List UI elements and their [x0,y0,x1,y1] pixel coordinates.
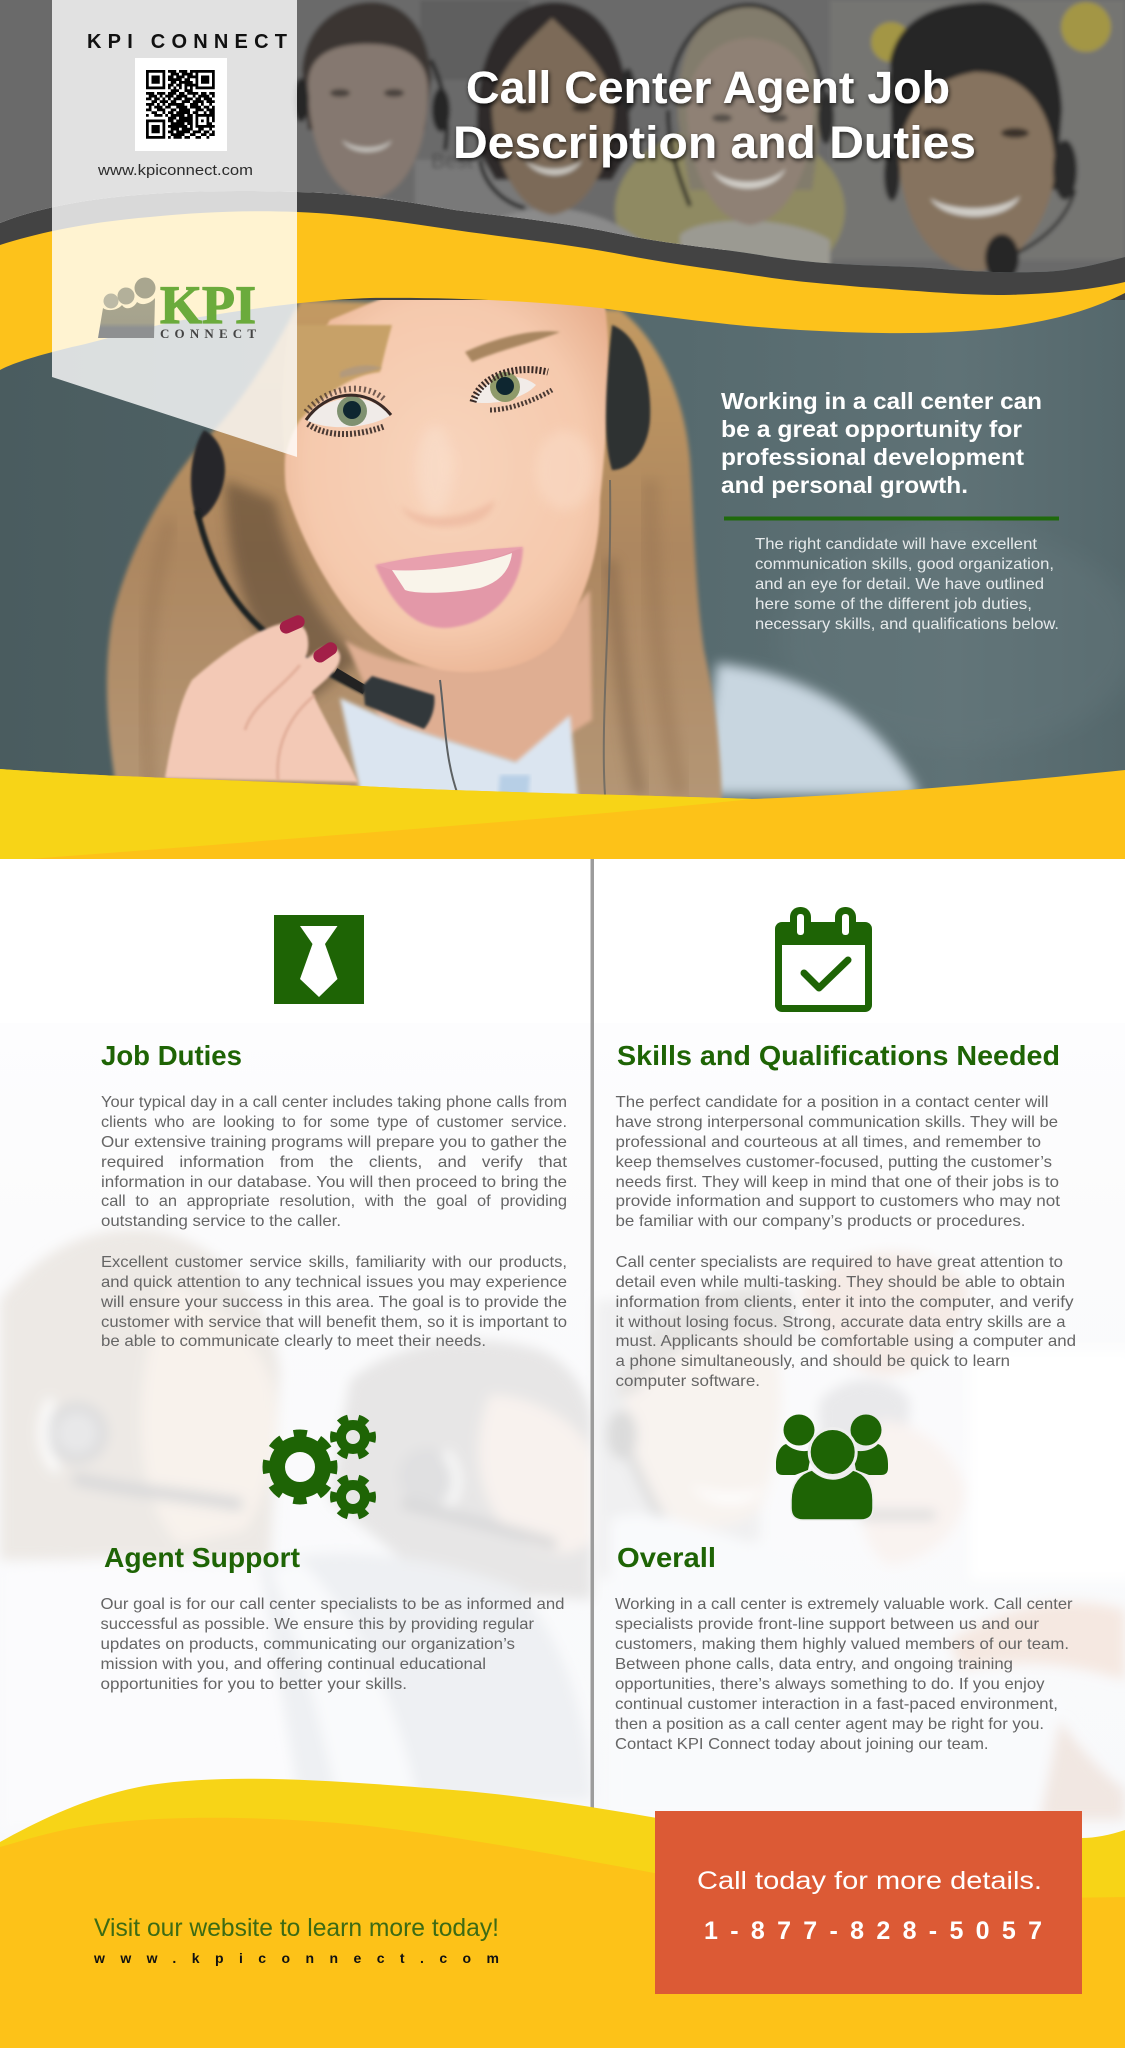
bottom wave: light yellow [0,1779,1125,2048]
brand name: KPI CONNECT [87,31,287,53]
overall text: customers, making them highly valued members of our team. [615,1636,1069,1653]
skills and qualifications text: Call center specialists are required to have great attention to [616,1254,1063,1271]
agent 4 [884,2,1077,282]
skills and qualifications text [616,1094,1076,1390]
skills and qualifications text: be familiar with our company’s products or procedures. [616,1213,1026,1230]
far right agents and hand [800,1252,1125,1820]
intro headline [721,388,1042,498]
bottom yellow band of hero [0,769,1125,859]
icon: group of people [776,1414,888,1520]
intro body text: The right candidate will have excellent [755,536,1038,553]
callout: phone number box: 1-877-828-5057 [704,1917,1042,1945]
faded background photo of call center agents [0,1226,1125,1827]
skills and qualifications text: a phone simultaneously, and should be quick to learn [616,1353,1010,1370]
agent support text: opportunities for you to better your skills. [100,1676,407,1693]
intro headline: be a great opportunity for [721,416,1022,442]
heading: job duties: Job Duties [101,1040,242,1071]
job duties text: will ensure your success in this area. The goal is to provide the [100,1294,567,1311]
intro headline: professional development [721,444,1024,470]
overall text: Between phone calls, data entry, and ongoing training [615,1656,1013,1673]
website call to action: www.kpiconnect.com [93,1950,499,1966]
left agent [0,1227,282,1562]
icon: calendar with check mark [775,907,872,1012]
skills and qualifications text: professional and courteous at all times, and remember to [616,1134,1041,1151]
left eye [306,389,391,434]
website url: www.kpiconnect.com [97,162,253,179]
intro headline: and personal growth. [721,472,968,498]
bottom wave: deep yellow [0,1818,1125,2048]
overall text: then a position as a call center agent may be right for you. [615,1716,1044,1733]
job duties text: required information from the clients, and verify that [101,1154,568,1171]
heading: skills and qualifications: Skills and Qualifications Needed [617,1040,1060,1071]
KPI Connect logo: KPI [160,275,256,335]
KPI Connect logo: CONNECT [160,326,256,341]
heading: agent support: Agent Support [104,1542,300,1573]
right eye [472,370,552,410]
icon: necktie [274,915,364,1004]
agent 2 [475,0,640,238]
skills and qualifications text: provide information and support to customers who may not [616,1193,1061,1210]
skills and qualifications text: needs first. They will keep in mind that one of their jobs is to [616,1174,1059,1191]
headset earpieces and boom [191,325,650,795]
overall text: continual customer interaction in a fast-paced environment, [615,1696,1058,1713]
website call to action [93,1914,499,1966]
microphone capsule [335,672,435,729]
website call to action: Visit our website to learn more today! [94,1914,499,1942]
overall text [615,1596,1073,1753]
job duties text: call to an appropriate resolution, with the goal of providing [101,1193,567,1210]
top photo: row of four smiling agents under dark overlay [0,0,1125,295]
intro body text: here some of the different job duties, [755,596,1032,613]
job duties text: information in our database. You will then proceed to bring the [101,1174,567,1191]
agent support text [100,1596,564,1693]
agent 3 [668,5,834,290]
intro body text: necessary skills, and qualifications below. [755,616,1059,633]
centre agent [260,1340,592,1810]
skills and qualifications text: computer software. [616,1373,760,1390]
skills and qualifications text: it without losing focus. Strong, accurate data entry skills are a [616,1314,1066,1331]
overall text: Contact KPI Connect today about joining our team. [615,1736,988,1753]
top photo: row of four smiling agents under dark overlay: Best [431,150,473,173]
agent support text: updates on products, communicating our organization’s [100,1636,515,1653]
overall text: Working in a call center is extremely valuable work. Call center [615,1596,1073,1613]
intro headline: Working in a call center can [721,388,1042,414]
skills and qualifications text: must. Applicants should be comfortable using a computer and [616,1333,1076,1350]
intro body text: and an eye for detail. We have outlined [755,576,1044,593]
intro body text [755,536,1059,633]
title: Call Center Agent Job [466,62,950,113]
job duties text: clients who are looking to for some type of customer service. [101,1114,567,1131]
job duties text: be able to communicate clearly to meet their needs. [101,1333,486,1350]
title [453,62,976,168]
hero photo: smiling call center agent with headset [0,250,1125,810]
heading: overall: Overall [617,1542,716,1573]
callout: phone number box [655,1811,1082,1994]
job duties text: outstanding service to the caller. [101,1213,341,1230]
green rule under intro [724,516,1059,520]
overall text: specialists provide front-line support between us and our [615,1616,1040,1633]
overall text: opportunities, there’s always something to do. If you enjoy [615,1676,1044,1693]
vertical divider [590,859,594,1809]
skills and qualifications text: The perfect candidate for a position in a contact center will [616,1094,1048,1111]
title: Description and Duties [453,117,976,168]
job duties text [100,1094,568,1350]
skills and qualifications text: have strong interpersonal communication skills. They will be [616,1114,1058,1131]
yellow wave band and dark band [0,191,1125,370]
agent support text: Our goal is for our call center specialists to be as informed and [100,1596,564,1613]
agent support text: mission with you, and offering continual educational [100,1656,486,1673]
agent support text: successful as possible. We ensure this by providing regular [100,1616,535,1633]
job duties text: Your typical day in a call center includes taking phone calls from [101,1094,567,1111]
job duties text: Our extensive training programs will prepare you to gather the [101,1134,567,1151]
job duties text: Excellent customer service skills, familiarity with our products, [101,1254,567,1271]
intro body text: communication skills, good organization, [755,556,1054,573]
translucent brand panel [52,0,297,457]
job duties text: customer with service that will benefit them, so it is important to [101,1314,567,1331]
right male agent [600,1284,800,1567]
icon: gears [267,1418,372,1516]
hand holding microphone [165,613,358,782]
callout: phone number box: Call today for more details. [697,1867,1042,1895]
agent 1 [294,0,452,199]
skills and qualifications text: information from clients, enter it into the computer, and verify [616,1294,1074,1311]
smile [375,547,523,628]
skills and qualifications text: keep themselves customer-focused, putting the customer’s [616,1154,1052,1171]
KPI Connect logo [98,275,256,341]
skills and qualifications text: detail even while multi-tasking. They should be able to obtain [616,1274,1065,1291]
job duties text: and quick attention to any technical issues you may experience [101,1274,567,1291]
QR code [135,58,227,151]
